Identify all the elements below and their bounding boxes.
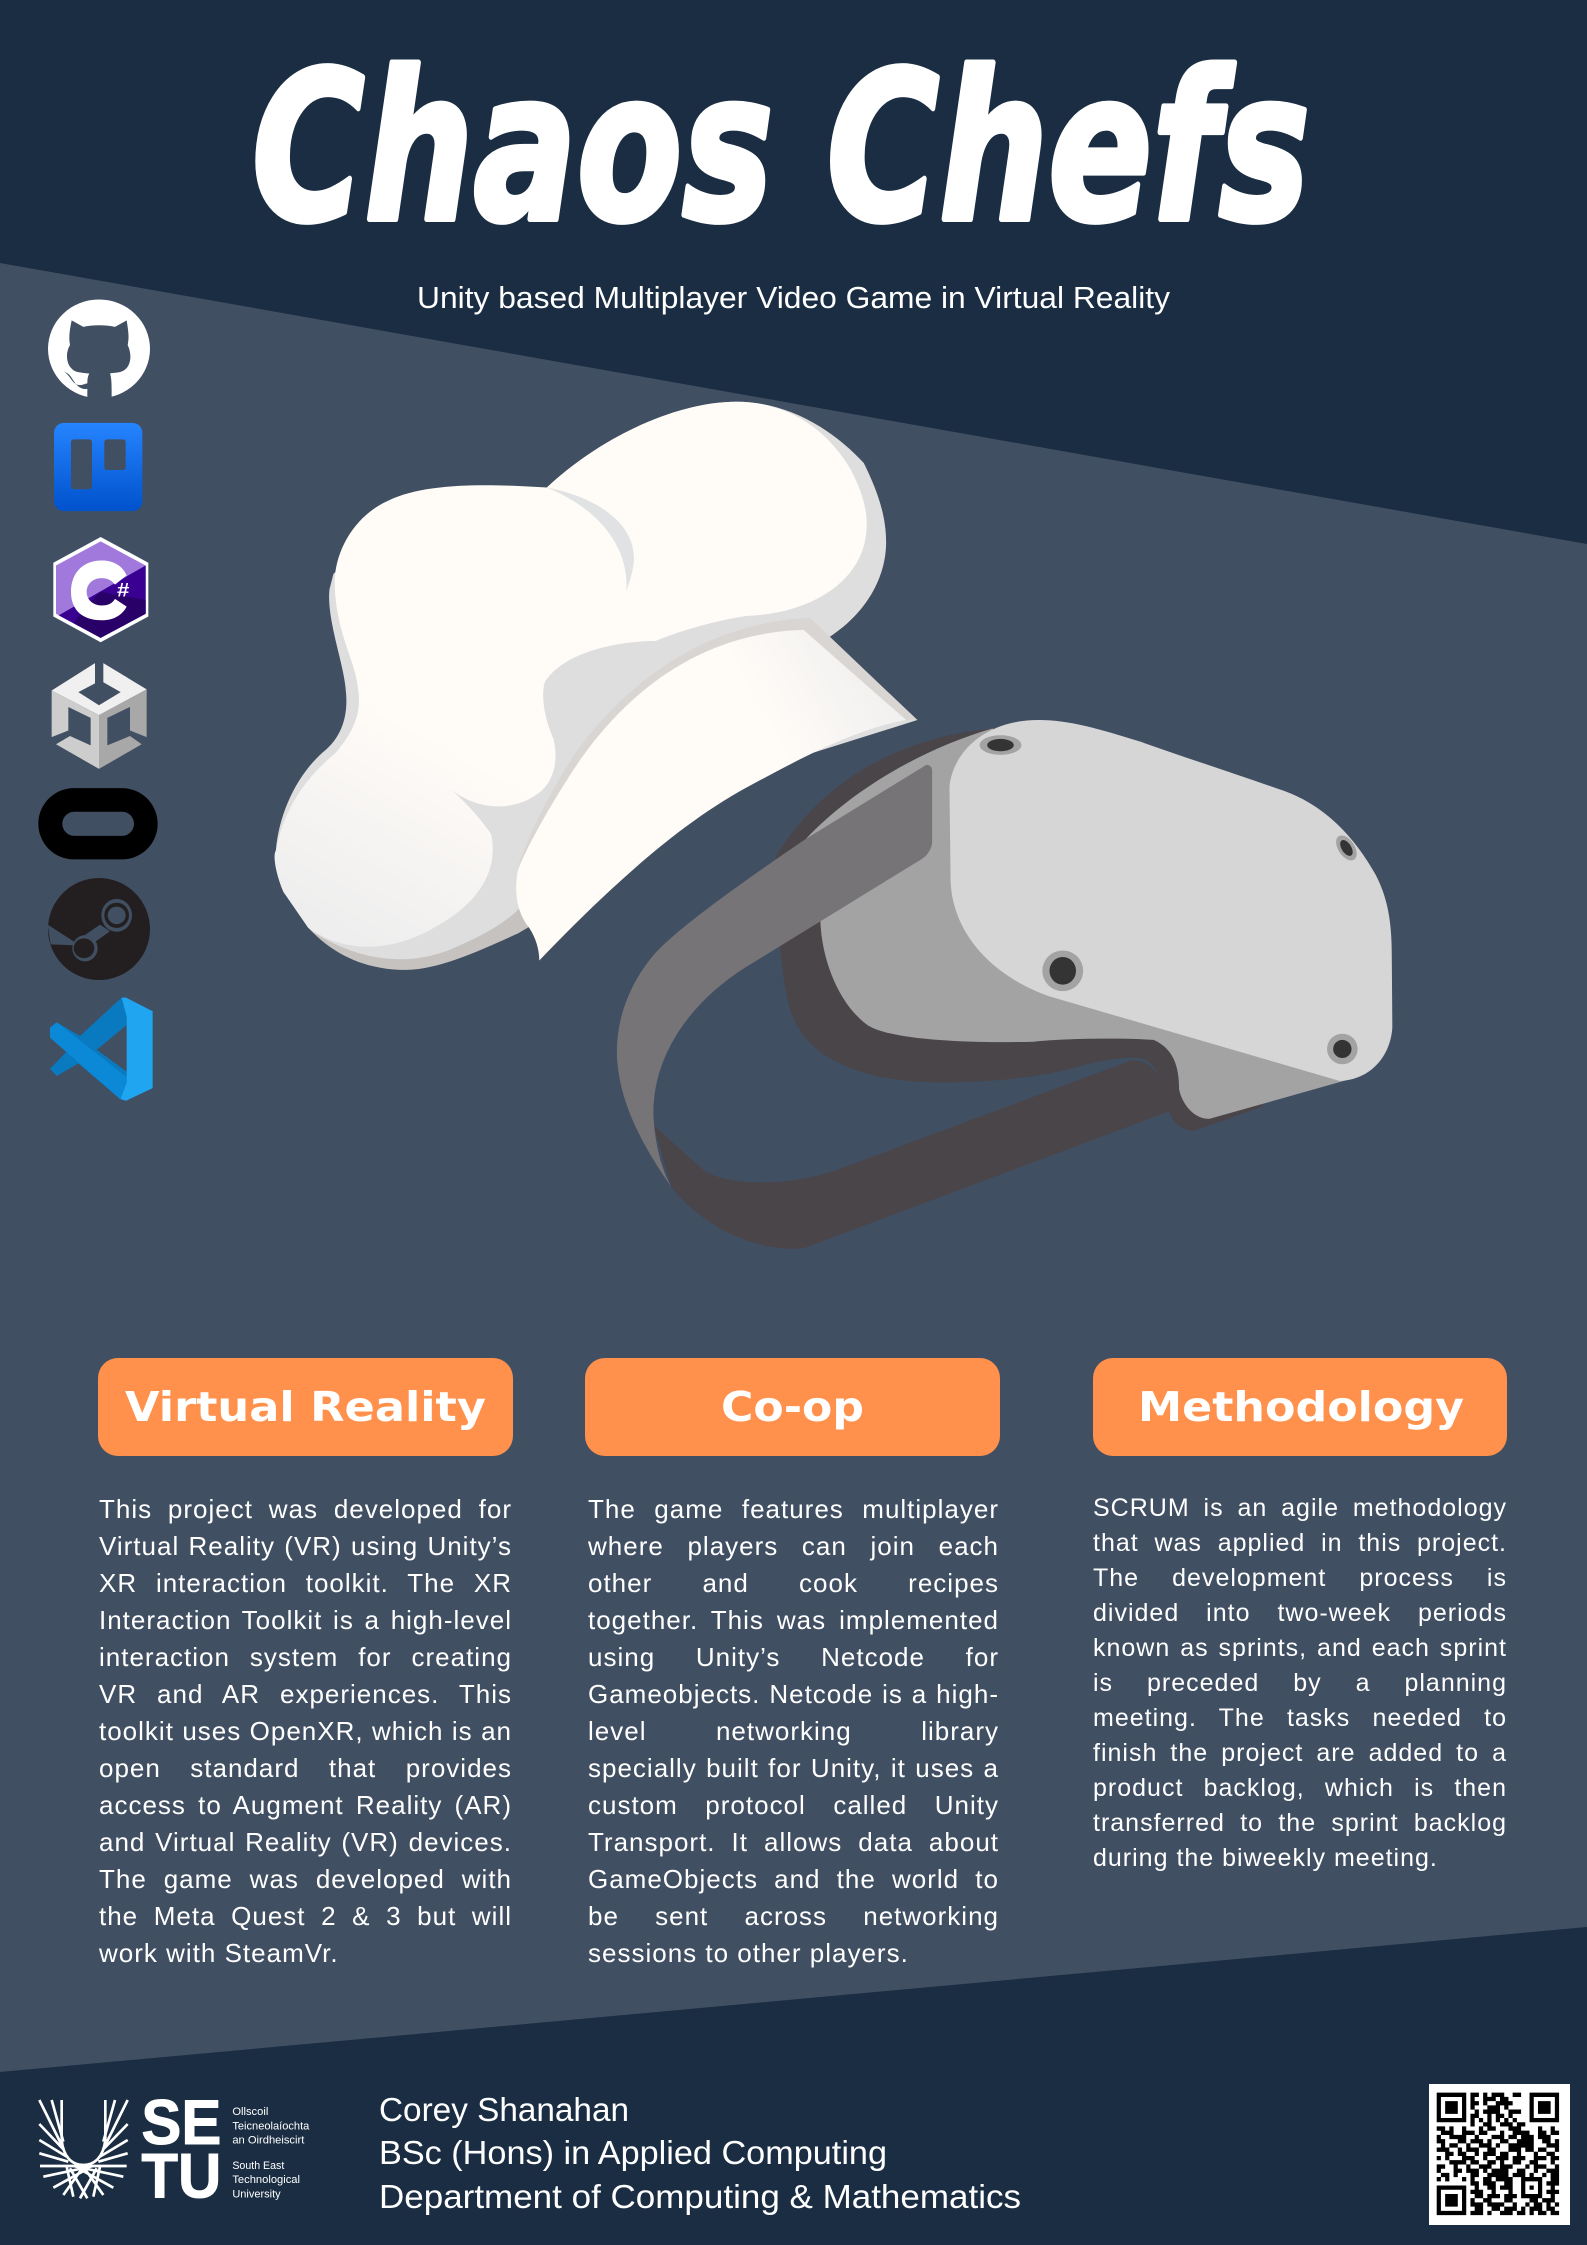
author details: Corey Shanahan <box>379 2091 629 2128</box>
text block: Virtual Reality: access to Augment Reality (AR) <box>99 1790 512 1820</box>
heading button: Co-op: Co-op <box>721 1383 864 1431</box>
illustration: chef hat <box>275 402 917 970</box>
text block: Methodology: known as sprints, and each sprint <box>1093 1634 1507 1662</box>
text block: Virtual Reality: interaction system for creating <box>99 1642 512 1672</box>
icon: Unity <box>52 663 147 769</box>
text block: Co-op: GameObjects and the world to <box>588 1864 999 1894</box>
text block: Methodology: divided into two-week periods <box>1093 1599 1507 1627</box>
logo wordmark: an Oirdheiscirt <box>232 2134 304 2146</box>
heading button: Methodology: Methodology <box>1138 1383 1464 1431</box>
text block: Virtual Reality: toolkit uses OpenXR, which is an <box>99 1716 512 1746</box>
logo wordmark: Ollscoil <box>232 2106 268 2118</box>
text block: Co-op: together. This was implemented <box>588 1605 999 1635</box>
text block: Co-op: be sent across networking <box>588 1901 999 1931</box>
text block: Co-op: Gameobjects. Netcode is a high- <box>588 1679 999 1709</box>
text block: Co-op: Transport. It allows data about <box>588 1827 999 1857</box>
heading button: Methodology <box>1093 1358 1507 1456</box>
text block: Methodology: product backlog, which is then <box>1093 1774 1507 1802</box>
heading button: Co-op <box>585 1358 1000 1456</box>
icon column: tools <box>38 299 158 1101</box>
text block: Methodology: that was applied in this project. <box>1093 1529 1507 1557</box>
text block: Virtual Reality: open standard that provides <box>99 1753 512 1783</box>
QR code <box>1429 2084 1570 2225</box>
logo: SETU <box>39 2088 310 2211</box>
text block: Virtual Reality: The game was developed with <box>99 1864 512 1894</box>
text block: Co-op: specially built for Unity, it uses a <box>588 1753 999 1783</box>
logo wordmark: Teicneolaíochta <box>232 2120 310 2132</box>
text block: Methodology: is preceded by a planning <box>1093 1669 1507 1697</box>
text block: Virtual Reality: XR interaction toolkit. The XR <box>99 1568 512 1598</box>
text block: Virtual Reality: This project was developed for <box>99 1494 512 1524</box>
text block: Co-op: where players can join each <box>588 1531 999 1561</box>
subtitle: Unity based Multiplayer Video Game in Virtual Reality <box>417 280 1171 315</box>
icon: Oculus <box>38 788 158 859</box>
text block: Co-op: custom protocol called Unity <box>588 1790 999 1820</box>
heading button: Virtual Reality <box>98 1358 513 1456</box>
author details: Department of Computing & Mathematics <box>379 2178 1021 2215</box>
text block: Co-op: using Unity’s Netcode for <box>588 1642 999 1672</box>
heading button: Virtual Reality: Virtual Reality <box>125 1383 486 1431</box>
text block: Methodology: meeting. The tasks needed to <box>1093 1704 1507 1732</box>
text block: Methodology: during the biweekly meeting. <box>1093 1844 1438 1872</box>
text block: Virtual Reality: work with SteamVr. <box>99 1938 339 1968</box>
logo wordmark: University <box>232 2188 281 2200</box>
text block: Co-op: The game features multiplayer <box>588 1494 999 1524</box>
author details: BSc (Hons) in Applied Computing <box>379 2134 887 2171</box>
text block: Methodology <box>1093 1494 1507 1872</box>
text block: Methodology: SCRUM is an agile methodology <box>1093 1494 1507 1522</box>
text block: Methodology: transferred to the sprint backlog <box>1093 1809 1507 1837</box>
text block: Virtual Reality: and Virtual Reality (VR) devices. <box>99 1827 512 1857</box>
text block: Co-op: sessions to other players. <box>588 1938 909 1968</box>
icon: Trello <box>54 423 142 511</box>
icon: VS Code <box>50 998 153 1101</box>
text block: Co-op: other and cook recipes <box>588 1568 999 1598</box>
text block: Methodology: The development process is <box>1093 1564 1507 1592</box>
text block: Virtual Reality: Interaction Toolkit is a high-level <box>99 1605 512 1635</box>
logo wordmark: SE <box>141 2088 221 2158</box>
logo mark: trident fan <box>39 2100 128 2198</box>
icon: Steam <box>48 878 150 980</box>
icon: GitHub <box>48 299 150 399</box>
icon: C sharp <box>53 537 148 642</box>
icon: C sharp: # <box>117 580 129 602</box>
author details <box>379 2091 1021 2215</box>
logo wordmark: TU <box>141 2141 221 2211</box>
illustration: VR headset <box>617 720 1392 1249</box>
text block: Virtual Reality: the Meta Quest 2 & 3 but will <box>99 1901 512 1931</box>
text block: Virtual Reality <box>99 1494 512 1968</box>
text block: Virtual Reality: Virtual Reality (VR) using Unity’s <box>99 1531 512 1561</box>
text block: Virtual Reality: VR and AR experiences. This <box>99 1679 512 1709</box>
text block: Co-op <box>588 1494 999 1968</box>
text block: Methodology: finish the project are added to a <box>1093 1739 1507 1767</box>
logo wordmark: South East <box>232 2160 284 2172</box>
logo wordmark <box>141 2088 310 2211</box>
logo wordmark: Technological <box>232 2174 300 2186</box>
text block: Co-op: level networking library <box>588 1716 999 1746</box>
